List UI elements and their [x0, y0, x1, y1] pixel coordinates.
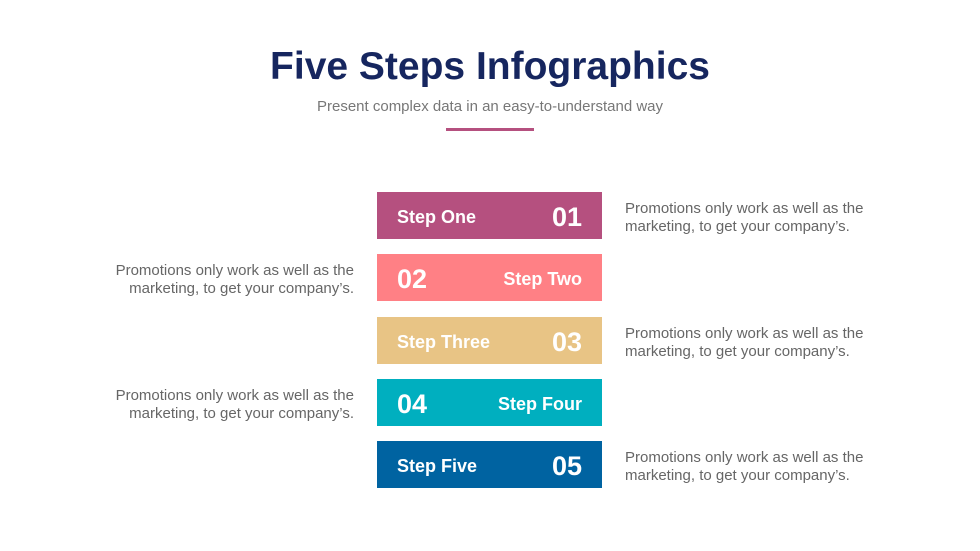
step 3 bar: Step Three — [397, 332, 490, 352]
text step 3 — [625, 325, 863, 360]
title: Five Steps Infographics — [270, 45, 710, 88]
step 5 bar: 05 — [552, 451, 582, 481]
text step 3: Promotions only work as well as the — [625, 325, 863, 342]
text step 4: Promotions only work as well as the — [116, 387, 354, 404]
title underline — [446, 128, 534, 131]
text step 1 — [625, 200, 863, 235]
step 1 bar: Step One — [397, 207, 476, 227]
step 5 bar: Step Five — [397, 456, 477, 476]
step 2 bar: 02 — [397, 264, 427, 294]
text step 2 — [116, 262, 354, 297]
text step 2: Promotions only work as well as the — [116, 262, 354, 279]
step 3 bar — [377, 317, 602, 364]
step 2 bar — [377, 254, 602, 301]
step 2 bar: Step Two — [503, 269, 582, 289]
step 4 bar — [377, 379, 602, 426]
text step 2: marketing, to get your company’s. — [129, 280, 354, 297]
subtitle: Present complex data in an easy-to-understand way — [317, 98, 663, 115]
step 4 bar: 04 — [397, 389, 427, 419]
text step 5 — [625, 449, 863, 484]
step 1 bar — [377, 192, 602, 239]
text step 1: Promotions only work as well as the — [625, 200, 863, 217]
step 4 bar: Step Four — [498, 394, 582, 414]
text step 4 — [116, 387, 354, 422]
text step 3: marketing, to get your company’s. — [625, 343, 850, 360]
text step 1: marketing, to get your company’s. — [625, 218, 850, 235]
step 5 bar — [377, 441, 602, 488]
step 3 bar: 03 — [552, 327, 582, 357]
text step 5: Promotions only work as well as the — [625, 449, 863, 466]
step 1 bar: 01 — [552, 202, 582, 232]
text step 4: marketing, to get your company’s. — [129, 405, 354, 422]
text step 5: marketing, to get your company’s. — [625, 467, 850, 484]
